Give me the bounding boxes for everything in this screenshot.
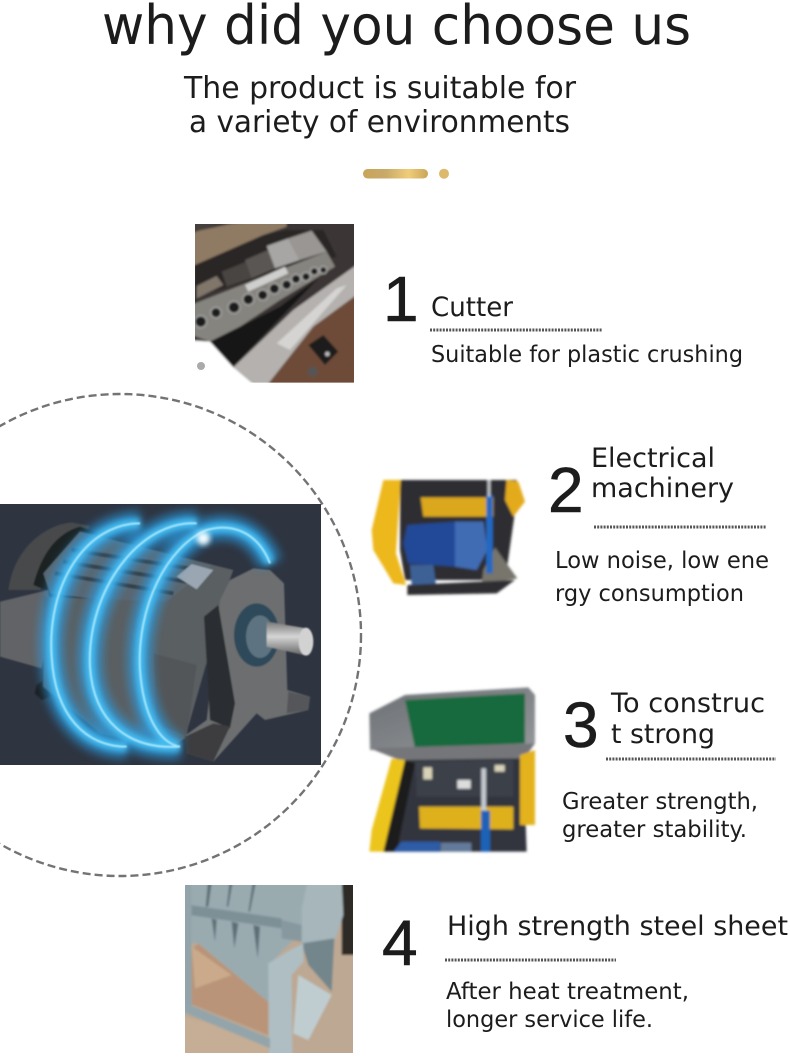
terminal box [0, 590, 52, 668]
heading: 3 To construct strong: 3 [563, 689, 599, 761]
heading: 2 Electrical machinery: Low noise, low ene [555, 548, 769, 574]
heading: 3 To construct strong: t strong [611, 719, 715, 750]
blue ring mid [51, 523, 270, 747]
subtitle: a variety of environments [189, 105, 570, 140]
heading: 4 High strength steel sheet [382, 907, 788, 1033]
heading: 1 Cutter: Cutter [431, 292, 514, 323]
heading: 3 To construct strong: To construc [610, 688, 765, 719]
heading: 4 High strength steel sheet: High strength steel sheet [447, 911, 788, 942]
heading: 2 Electrical machinery: Electrical [591, 443, 715, 474]
heading: 2 Electrical machinery: 2 [548, 454, 584, 526]
heading: 4 High strength steel sheet: After heat treatment, [446, 979, 689, 1005]
subtitle [183, 71, 577, 140]
heading: 2 Electrical machinery: machinery [591, 473, 734, 504]
motor rear cover [8, 522, 90, 590]
heading: 2 Electrical machinery: rgy consumption [555, 581, 744, 607]
blue ring core [51, 523, 270, 747]
heading: 4 High strength steel sheet: longer service life. [446, 1007, 653, 1033]
motor fins [43, 532, 213, 605]
heading: 1 Cutter: 1 [383, 263, 419, 335]
subtitle: The product is suitable for [183, 71, 577, 106]
middle housing [43, 565, 233, 750]
photo: cutter [195, 224, 354, 383]
heading: 3 To construct strong [562, 688, 776, 843]
photo: steel sheet machine [185, 885, 353, 1053]
dashed circle [0, 394, 361, 876]
heading: 4 High strength steel sheet: 4 [382, 907, 418, 979]
heading: 1 Cutter: Suitable for plastic crushing [431, 342, 743, 368]
photo: geared motor with blue rings [0, 504, 321, 765]
heading: 3 To construct strong: Greater strength, [562, 789, 758, 815]
heading: 3 To construct strong: greater stability. [562, 817, 747, 843]
heading: 1 Cutter [383, 263, 743, 368]
photo: strong construction [369, 687, 535, 852]
photo: electrical machinery [372, 480, 525, 595]
heading: 2 Electrical machinery [548, 443, 769, 607]
gearbox [186, 568, 310, 762]
blue ring glow [51, 523, 270, 747]
gold divider [363, 169, 449, 179]
